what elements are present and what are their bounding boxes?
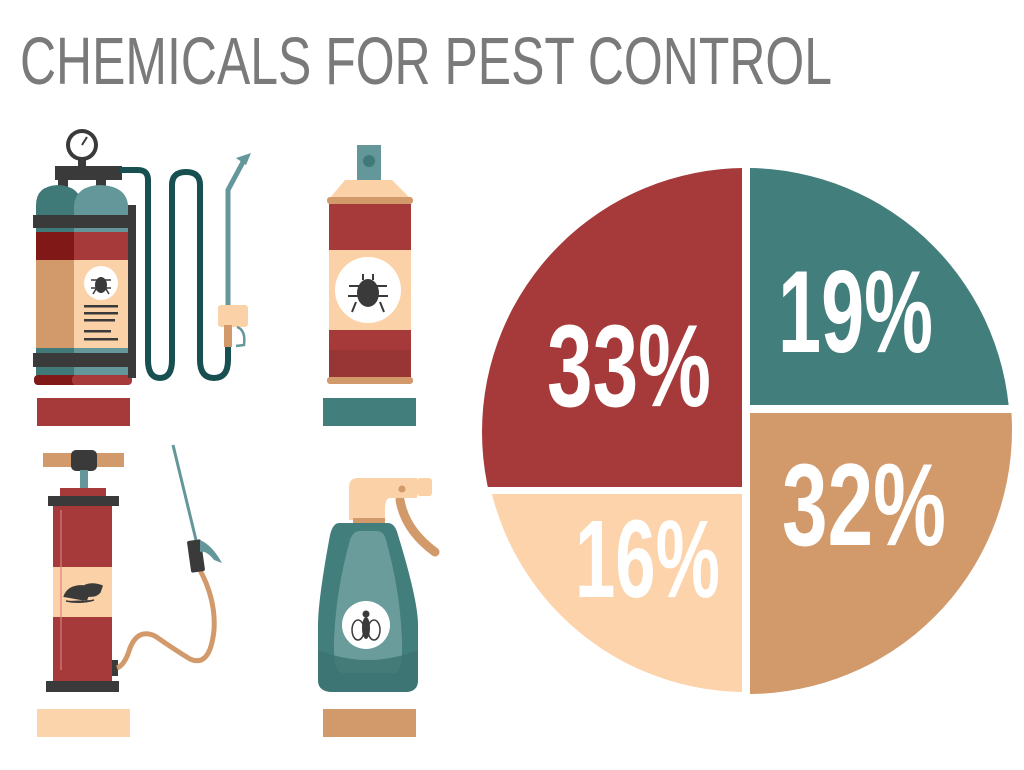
color bar: tan — [323, 709, 416, 737]
icon: pump sprayer — [43, 445, 222, 692]
slice: 16%: 16% — [575, 498, 720, 621]
icon: pressure sprayer — [33, 129, 251, 385]
icon: spray bottle — [318, 478, 435, 692]
slice: 32%: 32% — [782, 439, 946, 570]
color bar: light peach — [37, 709, 130, 737]
slice: 33%: 33% — [547, 300, 711, 431]
slice: 19%: 19% — [778, 246, 933, 377]
color bar: teal — [323, 398, 416, 426]
pie chart — [482, 166, 1012, 696]
color bar: red — [37, 398, 130, 426]
icon: aerosol can — [327, 145, 413, 384]
